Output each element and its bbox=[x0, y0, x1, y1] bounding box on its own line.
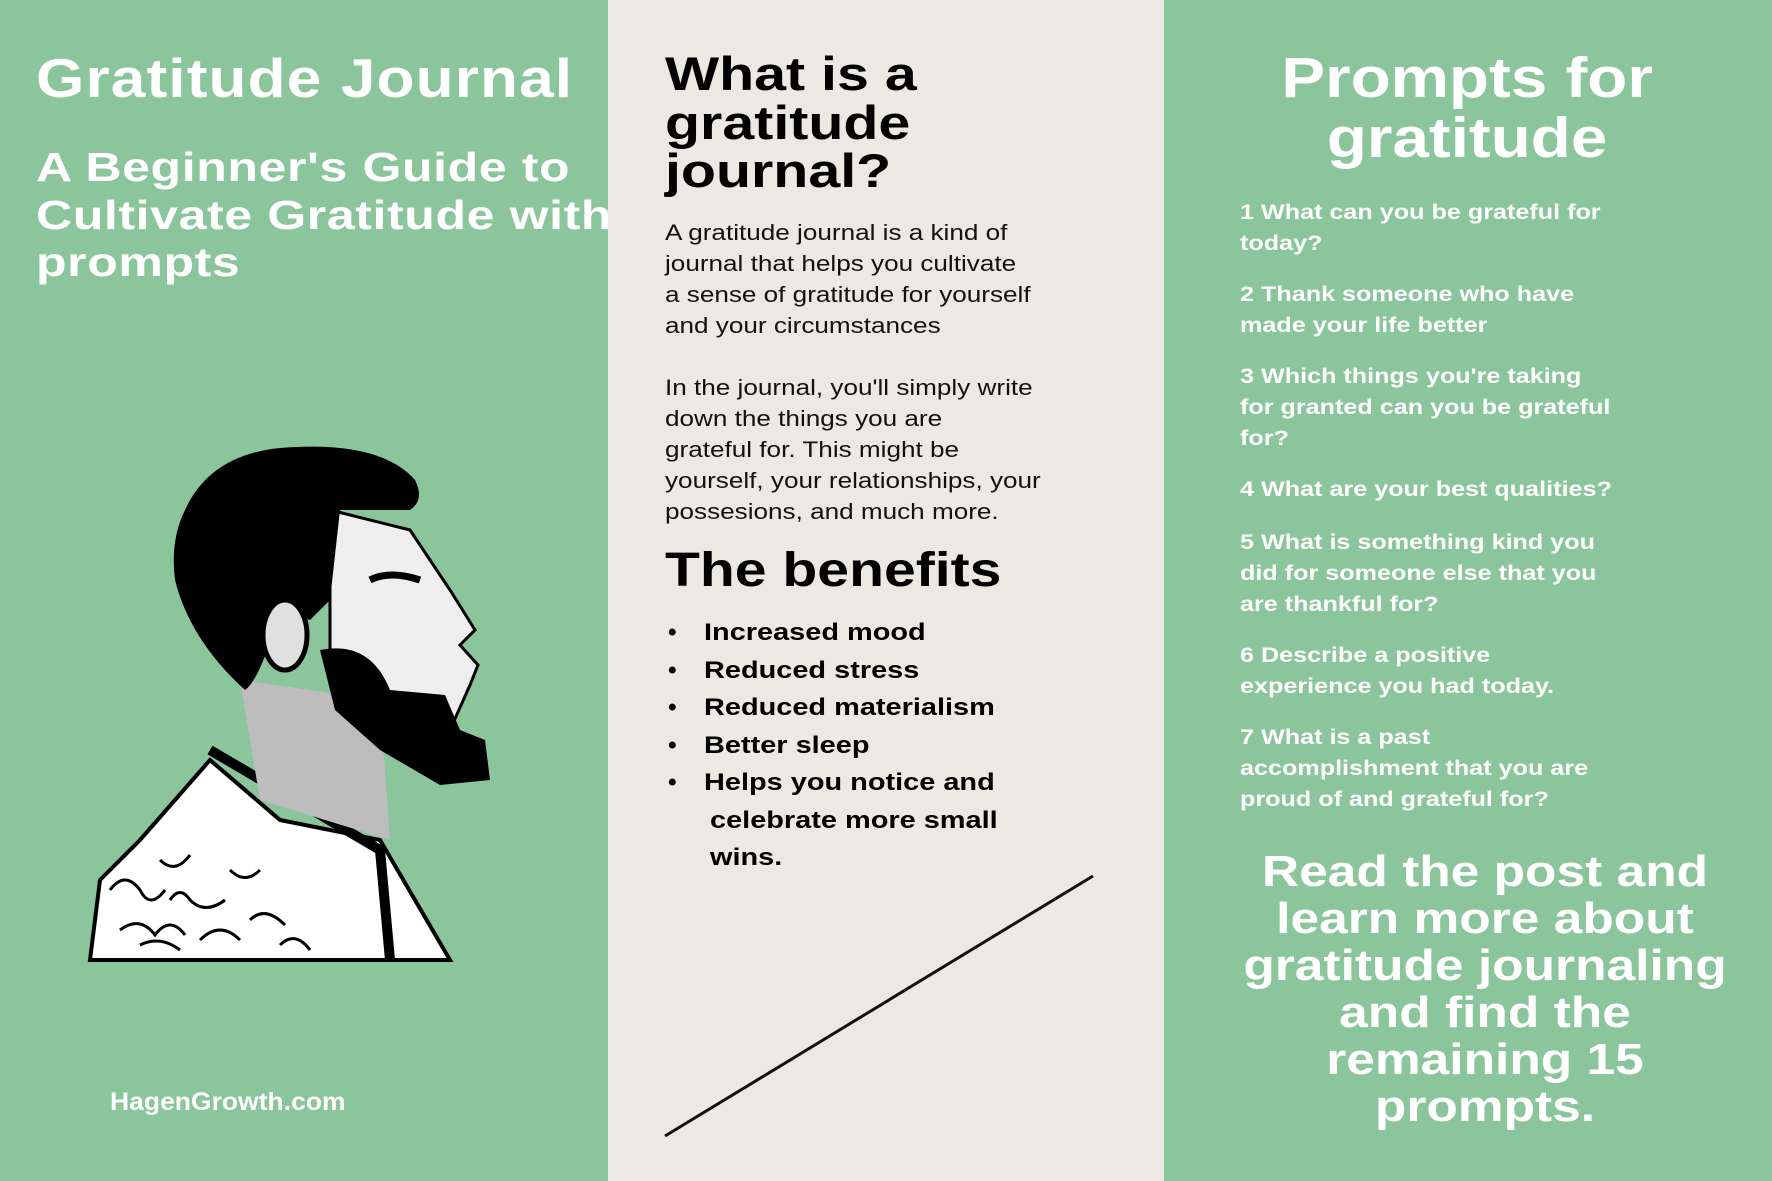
footer: website: HagenGrowth.com bbox=[110, 1088, 346, 1116]
callout: read the post: learn more about bbox=[1276, 894, 1694, 943]
text: definition: A gratitude journal is a kind of bbox=[665, 220, 1007, 245]
heading: what is bbox=[664, 47, 918, 197]
list: benefits: Reduced stress bbox=[704, 656, 919, 684]
callout: read the post: gratitude journaling bbox=[1243, 941, 1727, 990]
list: prompts: today? bbox=[1240, 231, 1322, 255]
panel: left bbox=[0, 0, 608, 1181]
callout: read the post: and find the bbox=[1339, 988, 1631, 1037]
heading: prompts bbox=[1281, 46, 1653, 170]
heading: what is: What is a bbox=[665, 47, 917, 100]
callout: read the post bbox=[1243, 847, 1727, 1131]
list: benefits: • bbox=[668, 656, 677, 684]
panel: right bbox=[1164, 0, 1772, 1181]
subtitle: Cultivate Gratitude with bbox=[36, 192, 612, 238]
text: description: down the things you are bbox=[665, 406, 942, 431]
heading: prompts: gratitude bbox=[1327, 106, 1607, 170]
text: definition: journal that helps you cultivate bbox=[665, 251, 1016, 276]
list: prompts: proud of and grateful for? bbox=[1240, 787, 1549, 811]
callout: read the post: remaining 15 bbox=[1326, 1035, 1644, 1084]
list: prompts: accomplishment that you are bbox=[1240, 756, 1588, 780]
list: prompts: 2 Thank someone who have bbox=[1240, 282, 1574, 306]
callout: read the post: Read the post and bbox=[1262, 847, 1708, 896]
list: prompts: 7 What is a past bbox=[1240, 725, 1430, 749]
list: benefits: Increased mood bbox=[704, 619, 926, 646]
list: benefits bbox=[668, 619, 998, 871]
list: benefits: • bbox=[668, 619, 677, 646]
subtitle: A Beginner's Guide to bbox=[36, 144, 570, 190]
list: prompts: for? bbox=[1240, 426, 1289, 450]
list: prompts: are thankful for? bbox=[1240, 592, 1438, 616]
heading: what is: journal? bbox=[665, 144, 891, 197]
text: description: yourself, your relationships, your bbox=[665, 468, 1041, 493]
list: benefits: • bbox=[668, 694, 677, 721]
text: definition: a sense of gratitude for yourself bbox=[665, 282, 1031, 307]
heading: what is: gratitude bbox=[665, 96, 910, 148]
title: Gratitude Journal bbox=[36, 47, 573, 109]
text: description: possesions, and much more. bbox=[665, 499, 999, 524]
list: prompts: 4 What are your best qualities? bbox=[1240, 477, 1612, 501]
decorative diagonal line bbox=[664, 874, 1094, 1138]
list: prompts: for granted can you be grateful bbox=[1240, 395, 1610, 419]
list: benefits: Better sleep bbox=[704, 732, 869, 758]
list: prompts: 5 What is something kind you bbox=[1240, 530, 1595, 554]
illustration: bearded man profile bbox=[88, 446, 490, 962]
list: benefits: • bbox=[668, 732, 677, 758]
text: description: grateful for. This might be bbox=[665, 437, 959, 462]
text: definition: and your circumstances bbox=[665, 313, 941, 338]
list: prompts: 6 Describe a positive bbox=[1240, 643, 1490, 667]
list: benefits: • bbox=[668, 769, 677, 796]
panel: middle bbox=[608, 0, 1164, 1181]
list: prompts: made your life better bbox=[1240, 313, 1487, 337]
subtitle: prompts bbox=[36, 239, 240, 285]
list: prompts bbox=[1240, 200, 1612, 811]
list: benefits: Helps you notice and bbox=[704, 769, 995, 796]
list: benefits: wins. bbox=[710, 844, 782, 871]
heading: benefits: The benefits bbox=[665, 544, 1001, 597]
list: benefits: Reduced materialism bbox=[704, 694, 995, 721]
text: description bbox=[665, 375, 1041, 524]
text: definition bbox=[664, 220, 1031, 338]
subtitle bbox=[36, 144, 612, 285]
text: description: In the journal, you'll simply write bbox=[665, 375, 1033, 400]
callout: read the post: prompts. bbox=[1375, 1082, 1595, 1131]
list: benefits: celebrate more small bbox=[710, 806, 998, 834]
list: prompts: experience you had today. bbox=[1240, 674, 1554, 698]
list: prompts: 1 What can you be grateful for bbox=[1240, 200, 1601, 224]
list: prompts: 3 Which things you're taking bbox=[1240, 364, 1581, 388]
list: prompts: did for someone else that you bbox=[1240, 561, 1596, 585]
heading: prompts: Prompts for bbox=[1281, 46, 1653, 110]
